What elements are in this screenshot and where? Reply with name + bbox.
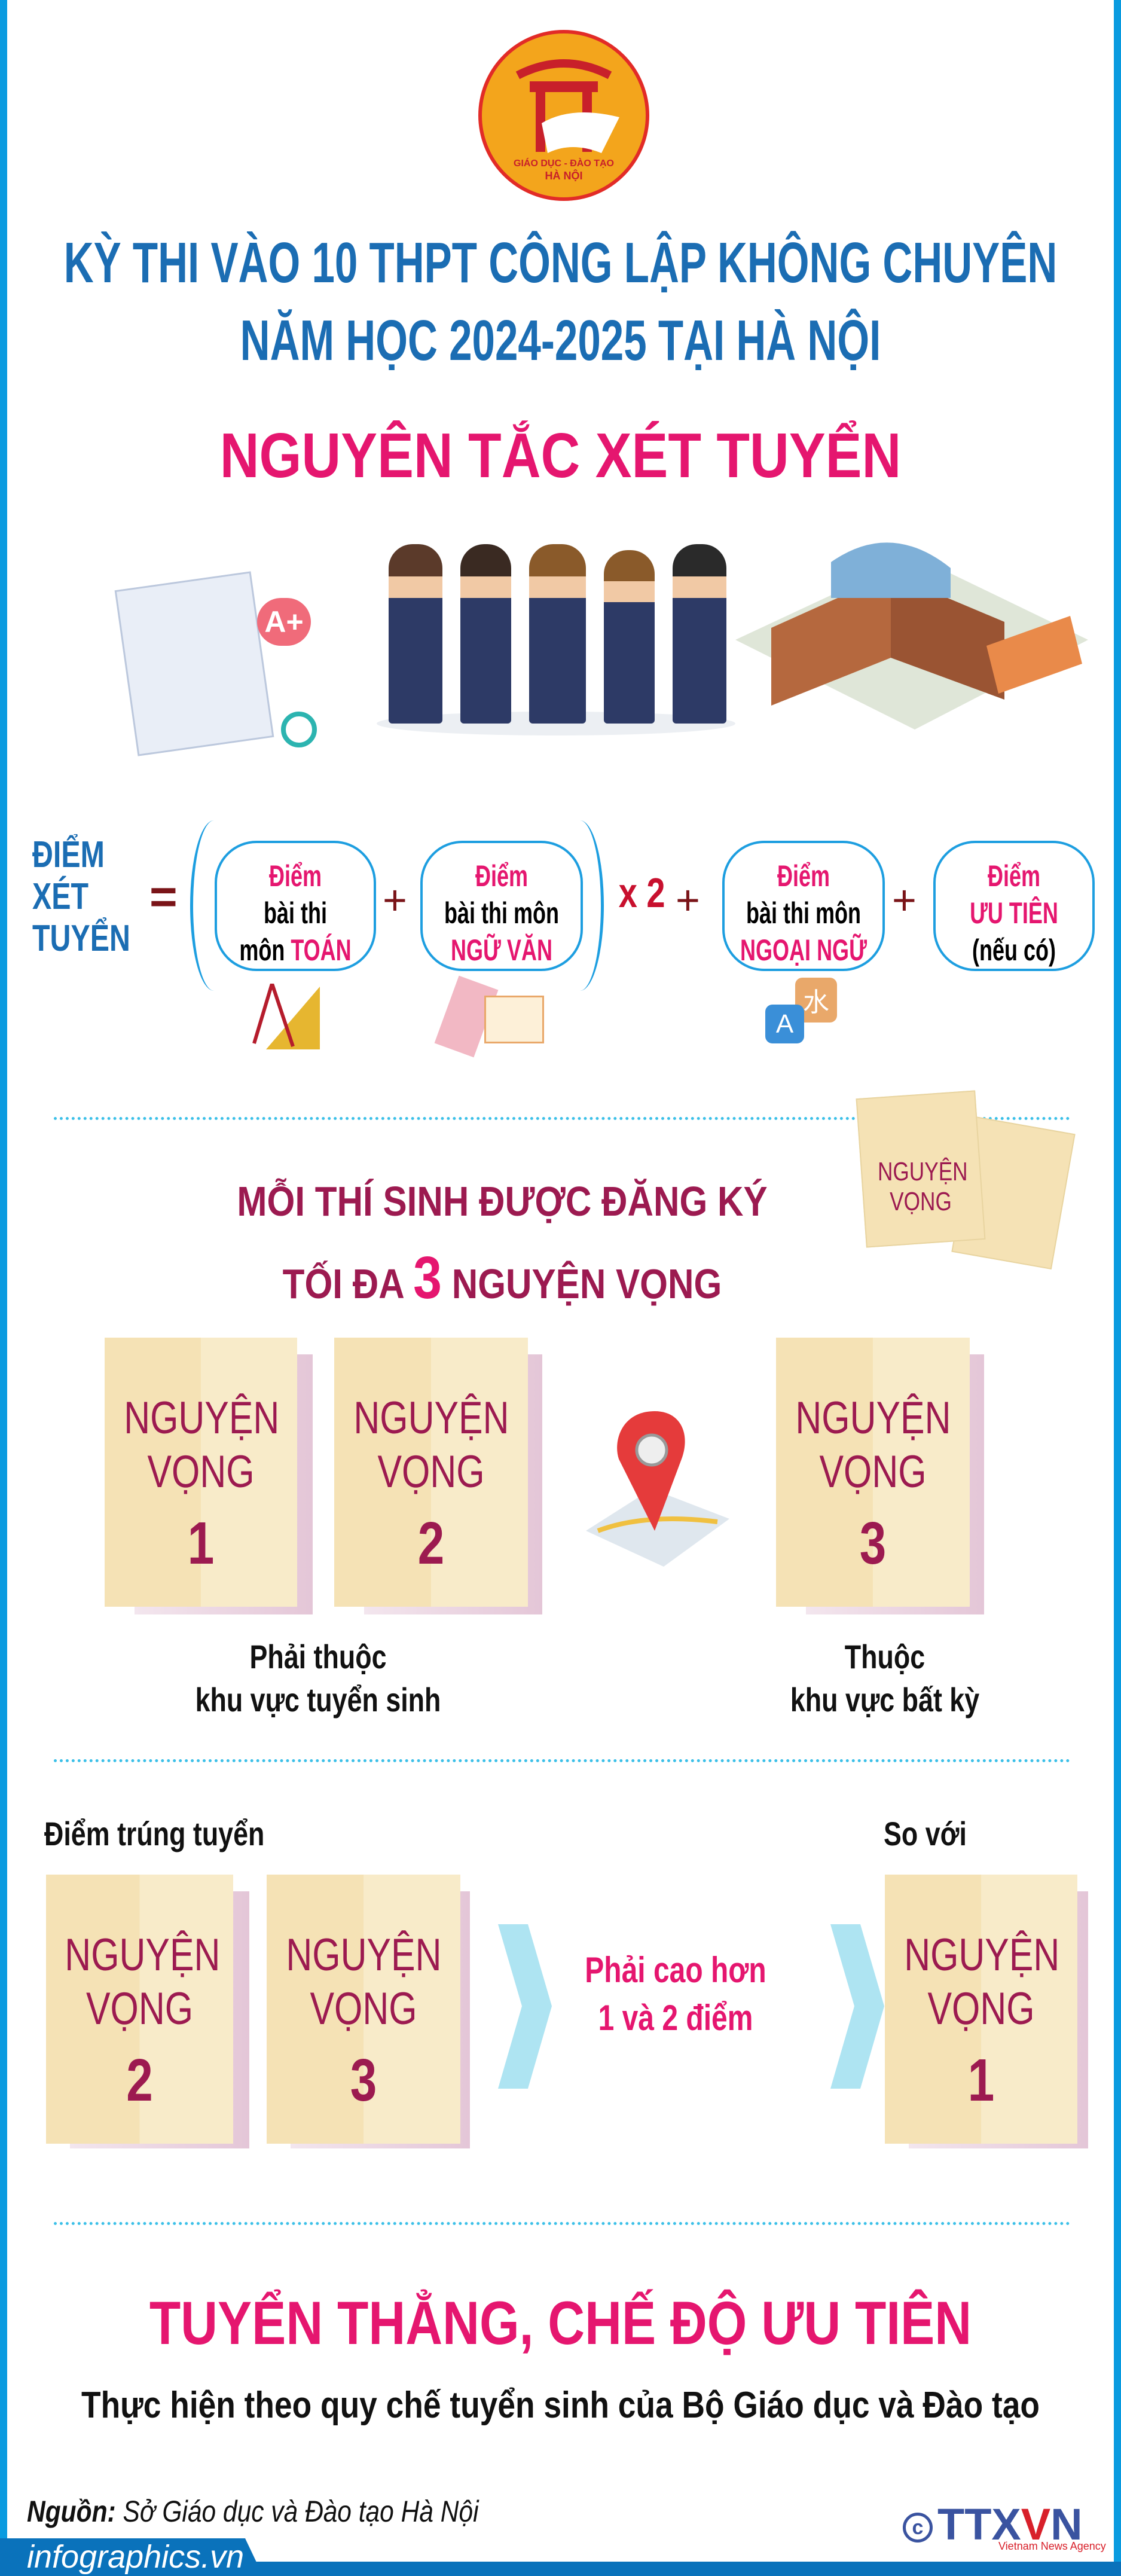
plus: + [892, 877, 917, 923]
icon: language: 水 [803, 981, 829, 1019]
plus: + [383, 877, 407, 923]
text: higher: 1 và 2 điểm [598, 1998, 753, 2038]
heading: max 3 wishes: MỖI THÍ SINH ĐƯỢC ĐĂNG KÝ [237, 1178, 768, 1225]
card NV2 row2 [46, 1875, 249, 2148]
box: ưu tiên [933, 841, 1095, 971]
formula label: TUYỂN [32, 918, 130, 959]
card NV1: NGUYỆN [124, 1393, 279, 1443]
caption NV3: khu vực bất kỳ [790, 1681, 979, 1719]
box: ngữ văn: Điểm [475, 859, 528, 893]
box: ngữ văn: NGỮ VĂN [451, 933, 552, 967]
illustration: school building [735, 542, 1088, 730]
card NV3: NGUYỆN [795, 1393, 951, 1443]
equals sign: = [149, 870, 178, 923]
icon: language: A [776, 1009, 793, 1039]
footer band [0, 2562, 1121, 2576]
card NV3 row2: VỌNG [310, 1983, 417, 2034]
card NV1 row2: NGUYỆN [904, 1930, 1059, 1980]
heading: max 3 wishes [237, 1178, 768, 1311]
box: toán: bài thi [264, 896, 327, 930]
box: ngữ văn: bài thi môn [444, 896, 559, 930]
box: toán: Điểm [269, 859, 322, 893]
subtitle: NGUYÊN TẮC XÉT TUYỂN [220, 420, 901, 491]
source: Nguồn: Sở Giáo dục và Đào tạo Hà Nội [27, 2495, 479, 2528]
footer tab: infographics.vn: infographics.vn [27, 2539, 244, 2575]
icon: book [434, 976, 544, 1057]
formula label: ĐIỂM [32, 834, 105, 875]
caption NV3 [790, 1638, 979, 1719]
card NV2 [334, 1338, 542, 1614]
formula label: XÉT [32, 876, 88, 917]
card NV1 row2 [885, 1875, 1088, 2148]
card NV1 row2: 1 [968, 2047, 994, 2114]
box: ngoại ngữ: bài thi môn [746, 896, 861, 930]
card NV3: 3 [860, 1510, 886, 1577]
label: So với: So với [884, 1815, 967, 1852]
logo: TTXVN: TTXVN [937, 2499, 1083, 2549]
x2: x 2 [619, 869, 665, 916]
bracket right [556, 820, 604, 991]
icon: ruler [252, 984, 320, 1049]
illustration: exam paper [115, 571, 317, 756]
card NV3: VỌNG [819, 1446, 927, 1497]
box: toán: môn TOÁN [239, 933, 352, 967]
logo: TTXVN: c [912, 2516, 923, 2539]
text: higher: Phải cao hơn [585, 1950, 766, 1990]
icon: map pin [586, 1411, 729, 1567]
logo [478, 30, 649, 201]
card NV1 row2: VỌNG [927, 1983, 1035, 2034]
box: ngoại ngữ: Điểm [777, 859, 830, 893]
bracket left [190, 820, 238, 991]
box: ngữ văn [420, 841, 583, 971]
card NV3 [776, 1338, 984, 1614]
caption NV1-2 [196, 1638, 441, 1719]
arrow 1 [498, 1924, 552, 2089]
arrow 2 [830, 1924, 884, 2089]
illustration: students [377, 544, 735, 735]
box: ngoại ngữ: NGOẠI NGỮ [740, 933, 867, 967]
text: regulation: Thực hiện theo quy chế tuyển sinh của Bộ Giáo dục và Đào tạo [81, 2385, 1040, 2426]
card NV1: VỌNG [147, 1446, 255, 1497]
heading: tuyển thẳng: TUYỂN THẲNG, CHẾ ĐỘ ƯU TIÊN [149, 2289, 972, 2357]
icon: envelopes: NGUYỆN [878, 1157, 968, 1186]
logo: TTXVN [903, 2499, 1106, 2552]
border frame [0, 0, 7, 2576]
formula label [32, 834, 130, 959]
card NV2: NGUYỆN [353, 1393, 509, 1443]
card NV3 row2 [267, 1875, 470, 2148]
plus: + [676, 877, 700, 923]
label: Điểm trúng tuyển: Điểm trúng tuyển [44, 1815, 264, 1852]
logo: HÀ NỘI [545, 169, 582, 182]
card NV2 row2: NGUYỆN [65, 1930, 220, 1980]
title: NĂM HỌC 2024-2025 TẠI HÀ NỘI [240, 309, 881, 373]
card NV2: VỌNG [377, 1446, 485, 1497]
caption NV3: Thuộc [845, 1638, 925, 1675]
caption NV1-2: Phải thuộc [250, 1638, 386, 1675]
title [64, 231, 1057, 373]
icon: language [765, 978, 837, 1043]
title: KỲ THI VÀO 10 THPT CÔNG LẬP KHÔNG CHUYÊN [64, 231, 1057, 295]
box: ngoại ngữ [722, 841, 885, 971]
box: ưu tiên: ƯU TIÊN [970, 896, 1058, 930]
card NV2 row2: 2 [126, 2047, 153, 2114]
caption NV1-2: khu vực tuyển sinh [196, 1681, 441, 1719]
card NV1 [105, 1338, 313, 1614]
card NV2 row2: VỌNG [86, 1983, 193, 2034]
box: ưu tiên: Điểm [988, 859, 1040, 893]
illustration: exam paper: A+ [264, 605, 304, 639]
icon: envelopes [856, 1090, 1076, 1269]
box: ưu tiên: (nếu có) [972, 933, 1056, 967]
card NV3 row2: NGUYỆN [286, 1930, 442, 1980]
card NV2: 2 [418, 1510, 444, 1577]
icon: envelopes: VỌNG [890, 1187, 952, 1216]
heading: max 3 wishes: TỐI ĐA 3 NGUYỆN VỌNG [283, 1244, 722, 1311]
card NV3 row2: 3 [350, 2047, 377, 2114]
logo: TTXVN: Vietnam News Agency [998, 2540, 1106, 2552]
box: toán [215, 841, 376, 971]
logo: GIÁO DỤC - ĐÀO TẠO [514, 157, 614, 169]
card NV1: 1 [188, 1510, 214, 1577]
text: higher [585, 1950, 766, 2038]
